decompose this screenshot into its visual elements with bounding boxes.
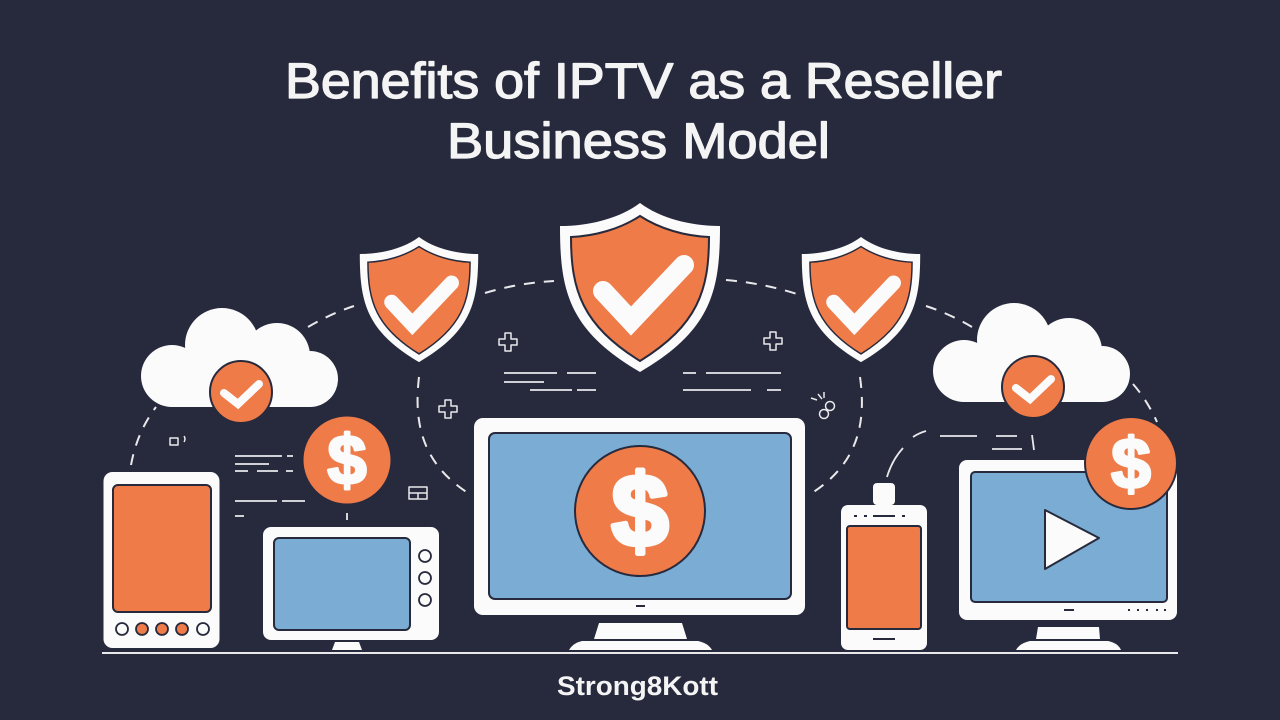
centre monitor with dollar badge: $ xyxy=(612,454,668,568)
brand name: Strong8Kott xyxy=(557,671,718,701)
title: Business Model xyxy=(447,113,830,169)
small TV device xyxy=(263,527,439,650)
dollar badge: right xyxy=(1085,417,1177,509)
decorative text lines: left xyxy=(235,456,305,516)
phone device xyxy=(841,483,927,650)
left cloud with check badge xyxy=(141,308,338,423)
dollar badge: left: $ xyxy=(328,421,366,499)
tablet device xyxy=(104,472,220,648)
small icons xyxy=(170,332,834,499)
centre shield xyxy=(560,203,720,372)
dollar badge: right: $ xyxy=(1111,425,1151,504)
baseline xyxy=(102,652,1178,654)
dashed connector lines xyxy=(131,280,1157,520)
right cloud with check badge xyxy=(933,303,1130,418)
title xyxy=(285,53,1002,169)
decorative text lines: centre xyxy=(504,373,781,390)
left shield xyxy=(360,237,478,362)
decorative text lines: right xyxy=(940,436,1022,449)
title: Benefits of IPTV as a Reseller xyxy=(285,53,1002,109)
right shield xyxy=(802,237,920,362)
right monitor with play button xyxy=(959,460,1177,650)
dollar badge: left xyxy=(302,416,392,504)
centre monitor with dollar badge xyxy=(474,418,805,650)
